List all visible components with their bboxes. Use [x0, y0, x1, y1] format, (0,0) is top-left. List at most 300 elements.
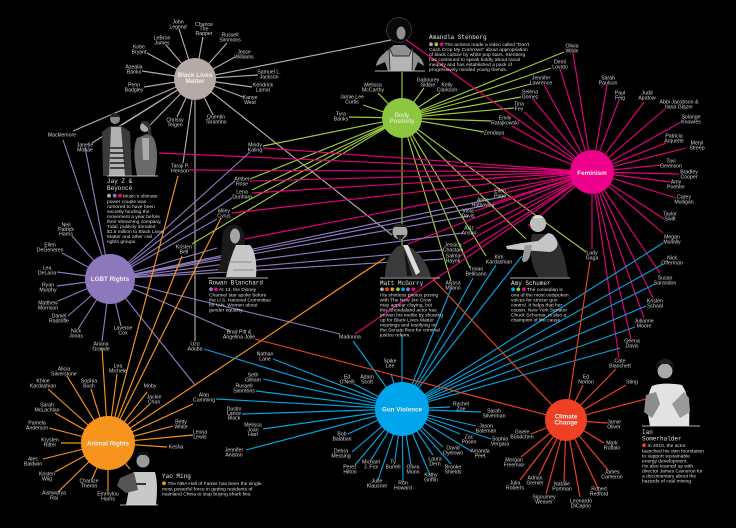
name labels: Gun Violence cluster: Joan [247, 427, 259, 433]
profile text: Ian Somerhalder: a documentary about the [642, 474, 696, 480]
name labels: Climate Change cluster: Blanchett [609, 363, 631, 369]
name labels: centre cluster: Anne [477, 198, 489, 204]
name labels: centre cluster: Bellisario [465, 271, 487, 277]
name labels: Body Positivity and upper Feminism cluster: Emily [499, 116, 511, 122]
profile text: Jay Z and Beyonce: power couple was [107, 199, 147, 205]
profile text: Jay Z and Beyonce: rumored to have been [107, 204, 155, 210]
name labels: centre cluster: Troian [469, 267, 483, 273]
name labels: top left cluster [48, 20, 281, 174]
name labels: Climate Change cluster: Ruffalo [604, 445, 620, 451]
name labels: Animal Rights cluster: Moby [144, 384, 157, 390]
name labels: Body Positivity and upper Feminism cluster: Zendaya [484, 131, 504, 137]
name labels: Body Positivity and upper Feminism cluster: Mullally [663, 239, 681, 245]
name labels: Body Positivity and upper Feminism cluster: Gabourey [417, 78, 439, 84]
name labels: centre cluster: Miley [218, 209, 230, 215]
name labels: Animal Rights cluster: White [174, 424, 188, 430]
profile text: Amy Schumer: cousin, New York Senator [511, 308, 567, 314]
name labels: top left cluster: The [200, 27, 209, 33]
name labels: Animal Rights cluster: Lea [114, 364, 122, 370]
name labels: Gun Violence cluster: Bob [337, 432, 347, 438]
name labels: Gun Violence cluster: Ed [344, 375, 350, 381]
name labels: Gun Violence cluster: Dern [429, 461, 441, 467]
name labels: Animal Rights cluster: Krysten [41, 438, 59, 444]
connector lines: LGBT Rights [57, 140, 506, 385]
name labels: Animal Rights cluster: Betty [175, 420, 187, 426]
profile text: Jay Z and Beyonce: Tidal, publicly donated [107, 224, 156, 230]
name labels: top left cluster: Teigen [167, 122, 183, 128]
name labels: centre cluster: Gaga [586, 255, 598, 261]
name labels: Gun Violence cluster: Brooke [445, 465, 461, 471]
name labels: Gun Violence cluster: Vergara [491, 441, 509, 447]
profile text: Matt McGorry: up for Black Lives Matter [380, 318, 434, 324]
name labels: top left cluster: Lamar [256, 87, 271, 93]
name labels: Animal Rights cluster: Kristen [39, 472, 55, 478]
name labels: centre cluster: Milano [445, 285, 461, 291]
name labels: LGBT Rights cluster [37, 223, 132, 352]
profile text: Jay Z and Beyonce: $1.5 million to Black Lives [107, 229, 164, 235]
profile text: Ian Somerhalder: In 2010, the actor [648, 443, 686, 449]
name labels: Body Positivity and upper Feminism cluster: Olivia [566, 44, 578, 50]
name labels: Animal Rights cluster: Leona [193, 430, 207, 436]
connector lines: Gun Violence [204, 243, 663, 482]
name labels: Gun Violence cluster: Debra [334, 449, 348, 455]
name labels: Gun Violence cluster: Melissa [244, 423, 262, 429]
name labels: Body Positivity and upper Feminism cluster: Ilana Glazer [665, 104, 693, 110]
name labels: Gun Violence cluster: Scott [361, 379, 373, 385]
name labels: Gun Violence cluster [193, 352, 509, 491]
name labels: Body Positivity and upper Feminism cluster: Lovato [552, 64, 568, 70]
name labels: Animal Rights cluster: Emmylou [97, 492, 119, 498]
name labels: Gun Violence cluster: Russell [235, 384, 253, 390]
name labels: Gun Violence cluster: Messing [331, 453, 351, 459]
name labels: Body Positivity and upper Feminism cluster: Patricia [665, 134, 683, 140]
photo: Yao Ming [117, 452, 158, 505]
name labels: centre cluster: Ansari [462, 230, 476, 236]
name labels: Gun Violence cluster: Lane [259, 356, 271, 362]
name labels: Climate Change cluster: Natalie [554, 482, 570, 488]
name labels: Gun Violence cluster: Amanda [470, 449, 490, 455]
name labels: Animal Rights cluster: Sophia [81, 379, 97, 385]
name labels: Gun Violence cluster: Zac [465, 435, 473, 441]
name labels: Climate Change cluster: Gisele [515, 430, 529, 436]
hub: Feminism: Feminism [577, 170, 607, 177]
hub: Black Lives Matter: Matter [186, 78, 205, 85]
name labels: centre cluster: Lady [586, 251, 598, 257]
profile text: Jay Z and Beyonce: Matter and other civil [107, 234, 152, 240]
name labels: Gun Violence cluster: Lance [227, 411, 241, 417]
name labels: Climate Change cluster: Weaver [535, 499, 553, 505]
name labels: Gun Violence cluster: Zoe [457, 406, 466, 412]
name labels: Gun Violence cluster: Ty [390, 460, 396, 466]
name labels: top left cluster: Penn [128, 83, 140, 89]
name labels: Gun Violence cluster: Alan [199, 393, 209, 399]
name labels: Body Positivity and upper Feminism cluster: Arquette [664, 138, 684, 144]
name labels: top left cluster: Williams [234, 54, 254, 60]
name labels: Gun Violence cluster: Jennifer [225, 448, 243, 454]
name labels: Gun Violence cluster: Gilliam [245, 377, 261, 383]
name labels: top left cluster: Monáe [77, 147, 93, 153]
profile text: Jay Z and Beyonce: Music's ultimate [123, 194, 158, 200]
profile text: Amy Schumer: one of the most outspoken [511, 293, 569, 299]
name labels: Animal Rights cluster: Lewis [193, 434, 207, 440]
hub: Animal Rights [81, 416, 135, 470]
name labels: centre cluster: Bell [180, 249, 188, 255]
profile text: Matt McGorry: proven his mettle by showing [380, 313, 443, 319]
profile text: Amy Schumer: control. It helps that her [511, 303, 562, 309]
profile text: Yao Ming [162, 473, 262, 498]
name labels: Body Positivity and upper Feminism cluster: Taylor [663, 212, 677, 218]
name labels: centre cluster: Hayek [446, 258, 461, 264]
name labels: Animal Rights cluster: Ritter [44, 442, 56, 448]
name labels: Gun Violence cluster: David [446, 446, 460, 452]
name labels: Gun Violence cluster: Balaban [332, 436, 352, 442]
name labels: Gun Violence cluster: Munn [407, 469, 420, 475]
name labels: Gun Violence cluster: Hilton [343, 469, 357, 475]
name labels: Climate Change cluster: Sigourney [532, 495, 556, 501]
name labels: Gun Violence cluster: Shields [444, 469, 462, 475]
hub: Body Positivity: Body [395, 112, 409, 119]
name labels: Gun Violence cluster: Perez [343, 465, 357, 471]
name labels: LGBT Rights cluster: Murphy [39, 287, 57, 293]
name labels: Gun Violence cluster: Howard [394, 485, 412, 491]
name labels: Climate Change cluster: Cate [615, 359, 625, 365]
profile text: Matt McGorry: His shirtless photos posing [380, 293, 438, 299]
name labels: Body Positivity and upper Feminism cluster: Paulson [599, 80, 617, 86]
name labels: LGBT Rights cluster: Patrick [58, 227, 74, 233]
name labels: Climate Change cluster: Ed [583, 375, 589, 381]
name labels: Animal Rights cluster: Aishwarya [42, 491, 66, 497]
name labels: Gun Violence cluster: Griffin [424, 477, 438, 483]
name labels: Animal Rights cluster [24, 364, 207, 502]
profile text: Jay Z and Beyonce: movement a year before [107, 214, 160, 220]
name labels: Body Positivity and upper Feminism cluster: Poehler [667, 184, 685, 190]
profile text: Ian Somerhalder: hazards of coal mining. [642, 478, 692, 484]
name labels: Body Positivity and upper Feminism cluster: Solange [681, 115, 701, 121]
name labels: centre cluster: Chastain [443, 247, 463, 253]
name labels: Gun Violence cluster: Silverman [482, 413, 506, 419]
name labels: top left cluster: Jesse [237, 50, 251, 56]
name labels: Gun Violence cluster: J. Fox [364, 464, 378, 470]
name labels: Body Positivity and upper Feminism cluster: Kelly [441, 83, 453, 89]
name labels: Gun Violence cluster: Ron [398, 481, 408, 487]
name labels: LGBT Rights cluster: Nick [71, 329, 81, 335]
hub: Climate Change: Change [554, 420, 578, 427]
name labels: top left cluster: Mindy [248, 143, 262, 149]
photo: Amandla Stenberg [375, 18, 425, 71]
name labels: Gun Violence cluster: Michael [362, 460, 380, 466]
name labels: top left cluster: Tarantino [205, 119, 227, 125]
profile text: Yao Ming: Yao Ming [162, 473, 191, 480]
profile text: Rowan Blanchard: Rowan Blanchard [209, 280, 263, 286]
connector lines: Animal Rights [43, 176, 385, 492]
profile text: Yao Ming: The NBA Hall of Famer has been the single [168, 481, 262, 487]
name labels: top left cluster: Macklemore [48, 133, 76, 139]
name labels: LGBT Rights cluster: DeLaria [38, 270, 56, 276]
name labels: Gun Violence cluster: Seth [248, 373, 258, 379]
name labels: Body Positivity and upper Feminism cluster: Gomez [522, 94, 539, 100]
name labels: Climate Change cluster: Leonardo [570, 499, 592, 505]
profile text: Amandla Stenberg: progressively minded young friends. [429, 67, 507, 73]
photo: Amy Schumer [506, 215, 570, 278]
name labels: Gun Violence cluster: Posen [462, 439, 476, 445]
name labels: LGBT Rights cluster: Neil [62, 223, 70, 229]
profile text: Rowan Blanchard: Channel star spoke before [209, 293, 267, 299]
profile text: Rowan Blanchard: for U.N. Women about [209, 303, 258, 309]
name labels: top left cluster: Kaling [248, 147, 262, 153]
name labels: Body Positivity and upper Feminism cluster: Moore [637, 323, 651, 329]
profile text: Amandla Stenberg: has continued to speak boldly about racial [429, 57, 520, 63]
profile text: Rowan Blanchard: the U.S. National Committee [209, 298, 271, 304]
name labels: Body Positivity and upper Feminism cluster: Melissa [364, 83, 382, 89]
name labels: Body Positivity and upper Feminism cluster: Megan [664, 235, 680, 241]
name labels: top left cluster: Henson [171, 168, 189, 174]
name labels: top left cluster: Samuel L. [257, 70, 281, 76]
name labels: centre cluster: Kristen [176, 245, 192, 251]
name labels: top left cluster: Taraji P. [171, 164, 189, 170]
name labels: top left cluster: Rapper [195, 31, 213, 37]
name labels: Climate Change cluster [504, 359, 638, 509]
name labels: Gun Violence cluster: Black [228, 416, 241, 422]
name labels: top left cluster: LeBron [154, 36, 170, 42]
profile text: Jay Z and Beyonce: secretly funding the [107, 209, 150, 215]
name labels: Body Positivity and upper Feminism cluster: Cooper [680, 174, 698, 180]
name labels: Gun Violence cluster: Cumming [193, 397, 215, 403]
name labels: Body Positivity and upper Feminism cluster: Judd [641, 91, 653, 97]
profile text: Rowan Blanchard: At 13, the Disney [219, 287, 257, 293]
profile text: Amy Schumer: Chuck Schumer, is also a [511, 313, 566, 319]
name labels: centre cluster: Angelina Jolie [223, 334, 255, 340]
name labels: Body Positivity and upper Feminism cluster: Streep [689, 145, 705, 151]
connector lines: Feminism [159, 39, 686, 358]
name labels: Body Positivity and upper Feminism cluster: Carey [677, 195, 691, 201]
name labels: LGBT Rights cluster: Laverne [114, 326, 132, 332]
profile text: Jay Z and Beyonce: Beyoncé [107, 185, 133, 192]
name labels: centre cluster [176, 177, 598, 352]
name labels: Gun Violence cluster: Lee [386, 363, 394, 369]
name labels: LGBT Rights cluster: Ariana [94, 342, 108, 348]
name labels: Body Positivity and upper Feminism cluster: Abbi Jacobson & [660, 100, 698, 106]
name labels: top left cluster: Simmons [219, 37, 241, 43]
name labels: LGBT Rights cluster: Ellen [44, 243, 56, 249]
name labels: Animal Rights cluster: Jackie [147, 395, 161, 401]
name labels: Body Positivity and upper Feminism cluster: Sidibe [421, 82, 435, 88]
name labels: LGBT Rights cluster: Matthew [38, 301, 58, 307]
profile text: Amandla Stenberg: of black culture by white pop stars. Stenberg [429, 52, 526, 58]
name labels: LGBT Rights cluster: Grande [92, 346, 110, 352]
name labels: centre cluster: Kardashian [486, 259, 512, 265]
hub: Body Positivity [382, 98, 422, 138]
name labels: top left cluster: Chrissy [166, 118, 184, 124]
name labels: Climate Change cluster: Jamie [607, 420, 621, 426]
name labels: LGBT Rights cluster: Morrison [38, 305, 58, 311]
name labels: LGBT Rights cluster: Lea [43, 266, 51, 272]
name labels: Gun Violence cluster: Oyelowo [443, 450, 463, 456]
name labels: LGBT Rights cluster: Harris [59, 232, 73, 238]
name labels: Body Positivity and upper Feminism cluster: Banks [334, 116, 349, 122]
photo: Ian Somerhalder [642, 359, 700, 426]
profile text: Matt McGorry: Matt McGorry [380, 280, 424, 287]
name labels: Animal Rights cluster: Pamela [28, 421, 46, 427]
name labels: Body Positivity and upper Feminism cluster: Nick [667, 256, 677, 262]
name labels: Gun Violence cluster: Kathy [424, 473, 438, 479]
name labels: Body Positivity and upper Feminism cluster: Swift [664, 216, 676, 222]
name labels: Body Positivity and upper Feminism cluster: Paul [615, 91, 625, 97]
name labels: Animal Rights cluster: Baldwin [24, 461, 42, 467]
name labels: top left cluster: Quentin [207, 115, 225, 121]
name labels: centre cluster: Kim [495, 255, 503, 261]
name labels: Animal Rights cluster: Alec [28, 457, 38, 463]
name labels: top left cluster: Jackson [259, 74, 279, 80]
hub: Climate Change [545, 399, 587, 441]
name labels: Body Positivity and upper Feminism cluster: Curtis [345, 99, 359, 105]
name labels: Body Positivity and upper Feminism cluster: McCarthy [362, 87, 384, 93]
profile text: Amy Schumer: voices for stricter gun [511, 298, 558, 304]
name labels: centre cluster: Madonna [339, 335, 361, 341]
profile text: Rowan Blanchard [209, 280, 271, 314]
profile text: Ian Somerhalder: to support sustainable [642, 454, 690, 460]
name labels: Animal Rights cluster: Harris [101, 496, 115, 502]
name labels: Animal Rights cluster: McLachlan [34, 407, 60, 413]
name labels: Gun Violence cluster: Klausner [367, 483, 388, 489]
name labels: Body Positivity and upper Feminism cluster: Demi [554, 60, 566, 66]
name labels: Body Positivity and upper Feminism cluster: Susan [658, 276, 672, 282]
name labels: Body Positivity and upper Feminism cluster: Schaal [647, 303, 663, 309]
name labels: Animal Rights cluster: Charlize [79, 479, 99, 485]
name labels: Animal Rights cluster: Michele [109, 368, 127, 374]
name labels: Animal Rights cluster: Anderson [26, 425, 48, 431]
name labels: top left cluster: James [154, 40, 170, 46]
name labels: centre cluster: Viola [462, 209, 474, 215]
name labels: LGBT Rights cluster: Cox [118, 330, 128, 336]
name labels: Body Positivity and upper Feminism cluster: Sarandon [654, 280, 676, 286]
profile text: Jay Z and Beyonce: Jay Z & [107, 178, 133, 185]
name labels: Gun Violence cluster: Dustin [227, 407, 241, 413]
profile text: Matt McGorry: may appear cloying, but [380, 303, 433, 309]
name labels: Body Positivity and upper Feminism cluster: Jennifer [532, 76, 550, 82]
name labels: Gun Violence cluster: Aniston [225, 452, 243, 458]
name labels: LGBT Rights cluster: DeGeneres [37, 247, 64, 253]
name labels: Body Positivity and upper Feminism cluster: Knowles [681, 119, 701, 125]
name labels: Gun Violence cluster: Sarah [487, 409, 501, 415]
name labels: centre cluster: Salma [446, 254, 460, 260]
profile text: Ian Somerhalder: Ian [642, 429, 653, 436]
profile text: Matt McGorry [379, 280, 443, 339]
name labels: Gun Violence cluster: Bateman [476, 428, 496, 434]
connector lines: Climate Change [255, 261, 646, 497]
hub: Feminism [570, 150, 614, 194]
name labels: Body Positivity and upper Feminism cluster: Feig [615, 95, 625, 101]
connector lines: Black Lives Matter [73, 29, 392, 341]
name labels: Gun Violence cluster: Jason [479, 424, 493, 430]
name labels: Body Positivity and upper Feminism cluster: Davis [626, 343, 639, 349]
name labels: Body Positivity and upper Feminism cluster: Geena [624, 339, 640, 345]
name labels: LGBT Rights cluster: Ryan [42, 283, 54, 289]
name labels: Body Positivity and upper Feminism cluster: Bradley [680, 170, 698, 176]
name labels: Body Positivity and upper Feminism cluster: Amy [671, 180, 681, 186]
name labels: top left cluster: Legend [169, 24, 187, 30]
name labels: centre cluster: Aduba [187, 346, 203, 352]
name labels: Body Positivity and upper Feminism cluster: Mulligan [674, 199, 694, 205]
name labels: centre cluster: Hathaway [471, 202, 495, 208]
hub: Black Lives Matter [174, 58, 216, 100]
photo: Jay Z and Beyonce [102, 113, 158, 176]
profile text: Ian Somerhalder: launched his own foundation [642, 448, 704, 454]
profile text: Amy Schumer: champion of the cause. [511, 318, 562, 324]
name labels: Gun Violence cluster: Rachel [453, 402, 469, 408]
name labels: Body Positivity and upper Feminism cluster: Tyra [336, 112, 346, 118]
name labels: centre cluster: Alyssa [445, 281, 461, 287]
name labels: centre cluster: Uzo [190, 342, 200, 348]
profile text: Ian Somerhalder: He also teamed up with [642, 464, 693, 470]
name labels: top left cluster: Kobe [133, 45, 145, 51]
name labels: Climate Change cluster: Adrian [528, 476, 542, 482]
name labels: top left cluster: Janelle [77, 143, 93, 149]
profile text: Jay Z and Beyonce: rights groups. [107, 239, 137, 245]
photo: Rowan Blanchard [208, 224, 268, 278]
name labels: Body Positivity and upper Feminism cluster: Kristen [647, 299, 663, 305]
name labels: Animal Rights cluster: Sarah [40, 403, 54, 409]
name labels: Body Positivity and upper Feminism cluster: Selena [522, 90, 538, 96]
name labels: Animal Rights cluster: Alicia [58, 367, 70, 373]
photo: Matt McGorry [380, 224, 440, 278]
name labels: Animal Rights cluster: Kardashian [30, 383, 56, 389]
name labels: centre cluster: Jessica [444, 243, 462, 249]
name labels: Gun Violence cluster: Laura [428, 457, 442, 463]
name labels: Climate Change cluster: Cameron [601, 474, 623, 480]
name labels: Body Positivity and upper Feminism cluster: Tavi [666, 159, 676, 165]
hub: Gun Violence: Gun Violence [382, 406, 423, 414]
name labels: Climate Change cluster: Robert [591, 487, 607, 493]
name labels: LGBT Rights cluster: Daniel [52, 314, 66, 320]
name labels: centre cluster: Brad Pitt & [227, 330, 251, 336]
name labels: Gun Violence cluster: Olivia [407, 465, 419, 471]
name labels: Gun Violence cluster: Simmons [233, 388, 255, 394]
name labels: top left cluster: Azealia [125, 65, 143, 71]
profile text: Matt McGorry: with The New Jim Crow [380, 298, 432, 304]
name labels: top left cluster: West [244, 100, 256, 106]
hub: Animal Rights: Animal Rights [87, 440, 130, 448]
name labels: Climate Change cluster: Roberts [506, 485, 524, 491]
name labels: centre cluster: Davis [462, 213, 475, 219]
profile text: Ian Somerhalder: energy development. [642, 458, 688, 464]
name labels: top left cluster: John [172, 20, 184, 26]
hub: Gun Violence [375, 382, 429, 436]
name labels: LGBT Rights cluster: Radcliffe [49, 318, 69, 324]
name labels: Climate Change cluster: Sting [626, 380, 638, 386]
profile text: Ian Somerhalder: Somerhalder [642, 436, 682, 442]
name labels: centre cluster: Page [494, 193, 506, 199]
name labels: top left cluster: Russell [221, 33, 239, 39]
profile text: Yao Ming: most powerful force in getting residents of [162, 486, 253, 492]
name labels: Body Positivity and upper Feminism cluster: Clarkson [437, 87, 457, 93]
hub: Body Positivity: Positivity [390, 118, 415, 125]
name labels: LGBT Rights cluster: Jonas [69, 333, 83, 339]
name labels: Climate Change cluster: Grenier [526, 480, 544, 486]
hub: LGBT Rights: LGBT Rights [91, 276, 130, 283]
profile text: Amandla Stenberg: Amandla Stenberg [429, 34, 487, 41]
name labels: Gun Violence cluster: O'Neill [339, 379, 355, 385]
name labels: centre cluster: Aziz [464, 226, 474, 232]
profile text: Amandla Stenberg: Cash Crop My Cornrows" about appropriation [429, 47, 528, 53]
name labels: Animal Rights cluster: Kesha [169, 445, 183, 451]
name labels: Gun Violence cluster: Nathan [257, 352, 273, 358]
name labels: Body Positivity and upper Feminism cluster: Sarah [601, 76, 615, 82]
profile text: Matt McGorry: justice reform. [379, 333, 411, 339]
profile text: Matt McGorry: the Senate floor for criminal [380, 328, 440, 334]
name labels: Body Positivity and upper Feminism cluster: Tina [514, 102, 524, 108]
profile text: Amandla Stenberg: The actress made a video called "Don't [444, 42, 530, 48]
name labels: Body Positivity and upper Feminism cluster: Wilde [566, 48, 579, 54]
